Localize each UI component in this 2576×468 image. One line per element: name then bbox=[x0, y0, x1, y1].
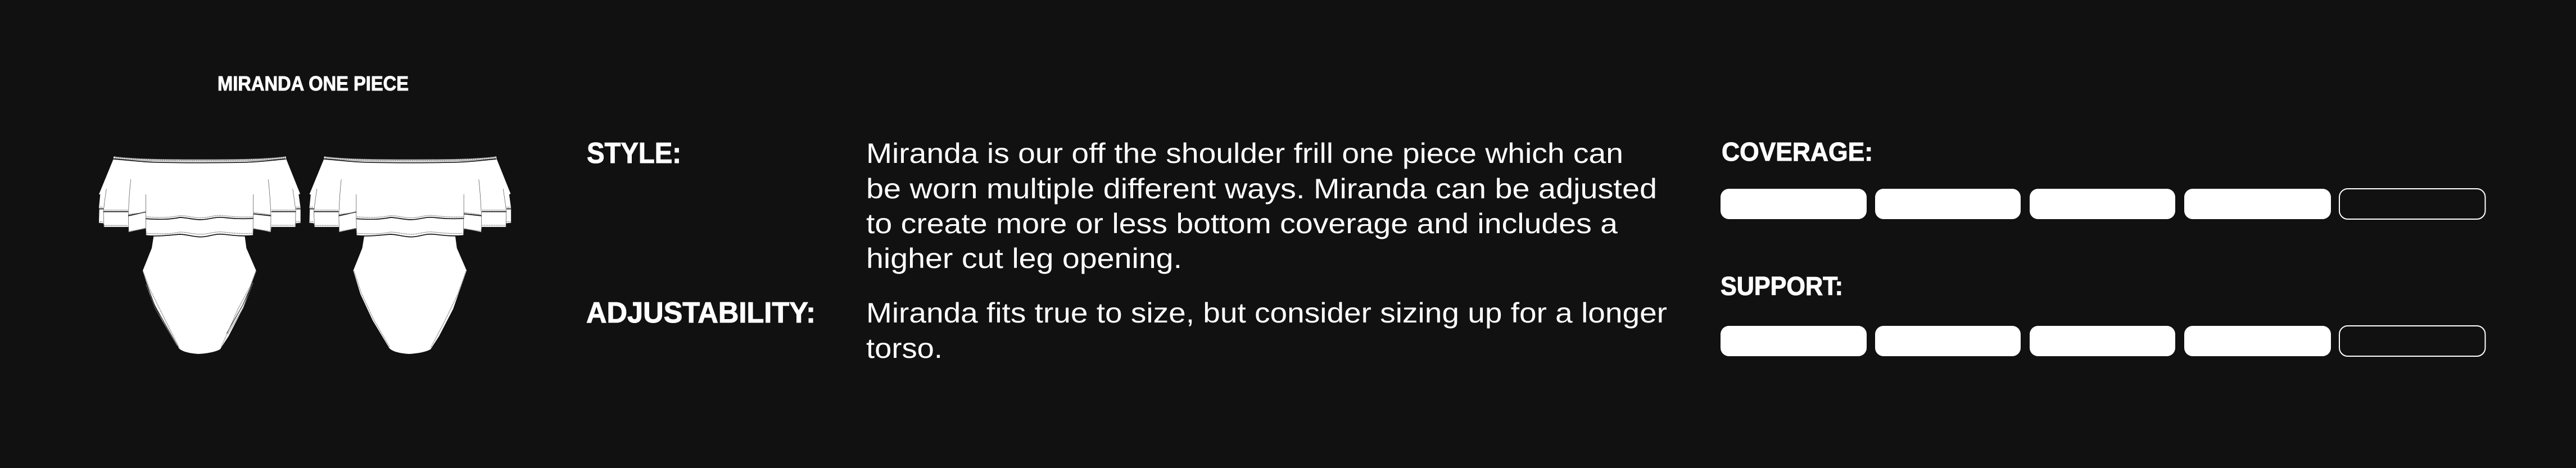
rating bar: support 4 of 5 bbox=[1721, 326, 2486, 356]
heading: style: STYLE: bbox=[587, 137, 681, 170]
heading: support: SUPPORT: bbox=[1721, 271, 1843, 301]
text block: style description: to create more or less bottom coverage and includes a bbox=[866, 208, 1618, 239]
text block: style description bbox=[866, 138, 1657, 274]
text block: adjustability description bbox=[866, 297, 1667, 364]
text block: style description: be worn multiple different ways. Miranda can be adjusted bbox=[866, 173, 1657, 205]
text block: style description: higher cut leg opening. bbox=[866, 243, 1182, 274]
heading: adjustability: ADJUSTABILITY: bbox=[586, 297, 816, 329]
text block: style description: Miranda is our off the shoulder frill one piece which can bbox=[866, 138, 1623, 169]
title: MIRANDA ONE PIECE bbox=[218, 72, 409, 95]
text block: adjustability description: torso. bbox=[866, 333, 943, 364]
text block: adjustability description: Miranda fits true to size, but consider sizing up for a longer bbox=[866, 297, 1667, 329]
heading: coverage: COVERAGE: bbox=[1722, 137, 1873, 166]
rating bar: coverage 4 of 5 bbox=[1721, 189, 2486, 219]
icon: swimsuit back view bbox=[309, 156, 511, 354]
icon: swimsuit front view bbox=[99, 156, 301, 354]
